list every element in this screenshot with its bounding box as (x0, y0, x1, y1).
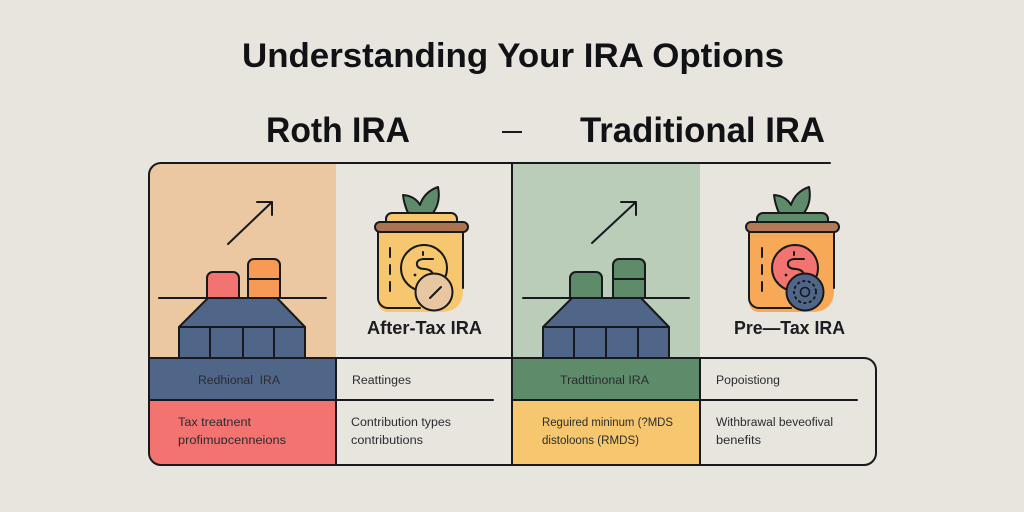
dash between headings (502, 131, 522, 133)
cell: withdrawal benefits: Withbrawal beveofival (716, 417, 833, 429)
cell: withdrawal benefits: benefits (716, 435, 761, 447)
cell: Roth tax treatment: profimuɒcenneions (178, 435, 286, 447)
table: Roth rows (149, 358, 451, 465)
table: Traditional rows (513, 358, 833, 465)
cell: required minimum distributions: Reguired mininum (?MDS (542, 417, 673, 429)
icon: green stacked block (613, 259, 645, 298)
cell: Roth tax treatment (149, 400, 335, 465)
cell: contribution types (351, 417, 451, 447)
icon: red block (207, 272, 239, 298)
icon: growth arrow (592, 202, 636, 243)
cell: required minimum distributions: distoloons (RMDS) (542, 435, 639, 447)
heading: Traditional IRA: Traditional IRA (580, 111, 825, 150)
cell: Roth header (149, 358, 335, 400)
cell: Roth tax treatment: Tax treatnent (178, 417, 252, 429)
cell: withdrawal benefits (716, 417, 833, 447)
cell: Traditional header: Tradttinonal IRA (560, 375, 649, 387)
cell: contribution types: Contribution types (351, 417, 451, 429)
cell: required minimum distributions (513, 400, 699, 465)
cell: Reattinges: Reattinges (352, 375, 411, 387)
icon: growth arrow (228, 202, 272, 244)
panel: Roth illustration (149, 164, 336, 358)
icon: Pre-Tax jar (746, 187, 839, 312)
label: Pre-Tax IRA: Pre—Tax IRA (734, 318, 845, 338)
icon: After-Tax jar (375, 187, 468, 312)
icon: green block (570, 272, 602, 298)
icon: building (523, 298, 689, 358)
title: Understanding Your IRA Options (242, 37, 784, 75)
icon: orange block (248, 259, 280, 298)
cell: Popoistiong: Popoistiong (716, 375, 780, 387)
cell: Roth header: Redhional IRA (198, 375, 280, 387)
panel: Traditional illustration (513, 164, 700, 358)
cell: Traditional header (513, 358, 699, 400)
heading: Roth IRA: Roth IRA (266, 111, 410, 150)
icon: building (159, 298, 326, 358)
cell: contribution types: contributions (351, 435, 423, 447)
label: After-Tax IRA: After-Tax IRA (367, 318, 482, 338)
